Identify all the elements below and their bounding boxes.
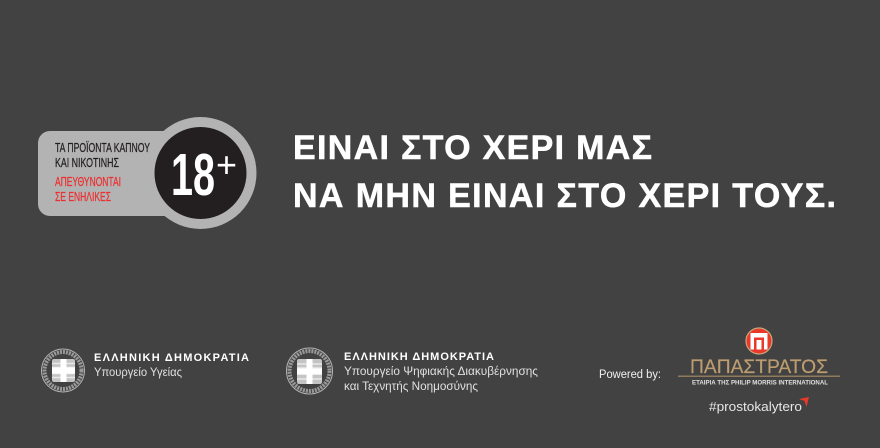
digital governance ministry label: ΕΛΛΗΝΙΚΗ ΔΗΜΟΚΡΑΤΙΑ	[344, 351, 494, 363]
digital governance ministry label: Υπουργείο Ψηφιακής Διακυβέρνησης	[344, 366, 538, 378]
brand subtitle: ΕΤΑΙΡΙΑ ΤΗΣ PHILIP MORRIS INTERNATIONAL	[692, 380, 828, 386]
icon: logo roundel	[746, 328, 772, 354]
badge text	[55, 140, 150, 204]
Papastratos logo	[678, 328, 840, 386]
digital governance ministry label: και Τεχνητής Νοημοσύνης	[344, 381, 478, 393]
ministry of health label	[94, 352, 249, 379]
icon: red arrow mark	[799, 397, 809, 407]
headline: ΕΙΝΑΙ ΣΤΟ ΧΕΡΙ ΜΑΣ	[293, 129, 652, 167]
badge text: ΤΑ ΠΡΟΪΟΝΤΑ ΚΑΠΝΟΥ	[55, 140, 150, 155]
badge text: ΚΑΙ ΝΙΚΟΤΙΝΗΣ	[55, 155, 119, 170]
brand name: ΠΑΠΑΣΤΡΑΤΟΣ	[690, 357, 828, 378]
hashtag: #prostokalytero	[709, 399, 802, 414]
age badge	[38, 117, 256, 229]
digital governance ministry label	[344, 351, 538, 393]
icon: Greek emblem, health ministry	[42, 349, 84, 392]
ministry of health label: ΕΛΛΗΝΙΚΗ ΔΗΜΟΚΡΑΤΙΑ	[94, 352, 249, 364]
18+ label: +	[216, 144, 237, 185]
powered by label: Powered by:	[599, 369, 661, 381]
badge text: ΣΕ ΕΝΗΛΙΚΕΣ	[55, 189, 111, 204]
badge text: ΑΠΕΥΘΥΝΟΝΤΑΙ	[55, 174, 121, 189]
headline	[293, 129, 836, 215]
icon: Greek emblem, digital governance ministry	[286, 348, 332, 394]
18+ label: 18	[171, 142, 215, 208]
headline: ΝΑ ΜΗΝ ΕΙΝΑΙ ΣΤΟ ΧΕΡΙ ΤΟΥΣ.	[293, 177, 836, 215]
ministry of health label: Υπουργείο Υγείας	[94, 367, 182, 379]
